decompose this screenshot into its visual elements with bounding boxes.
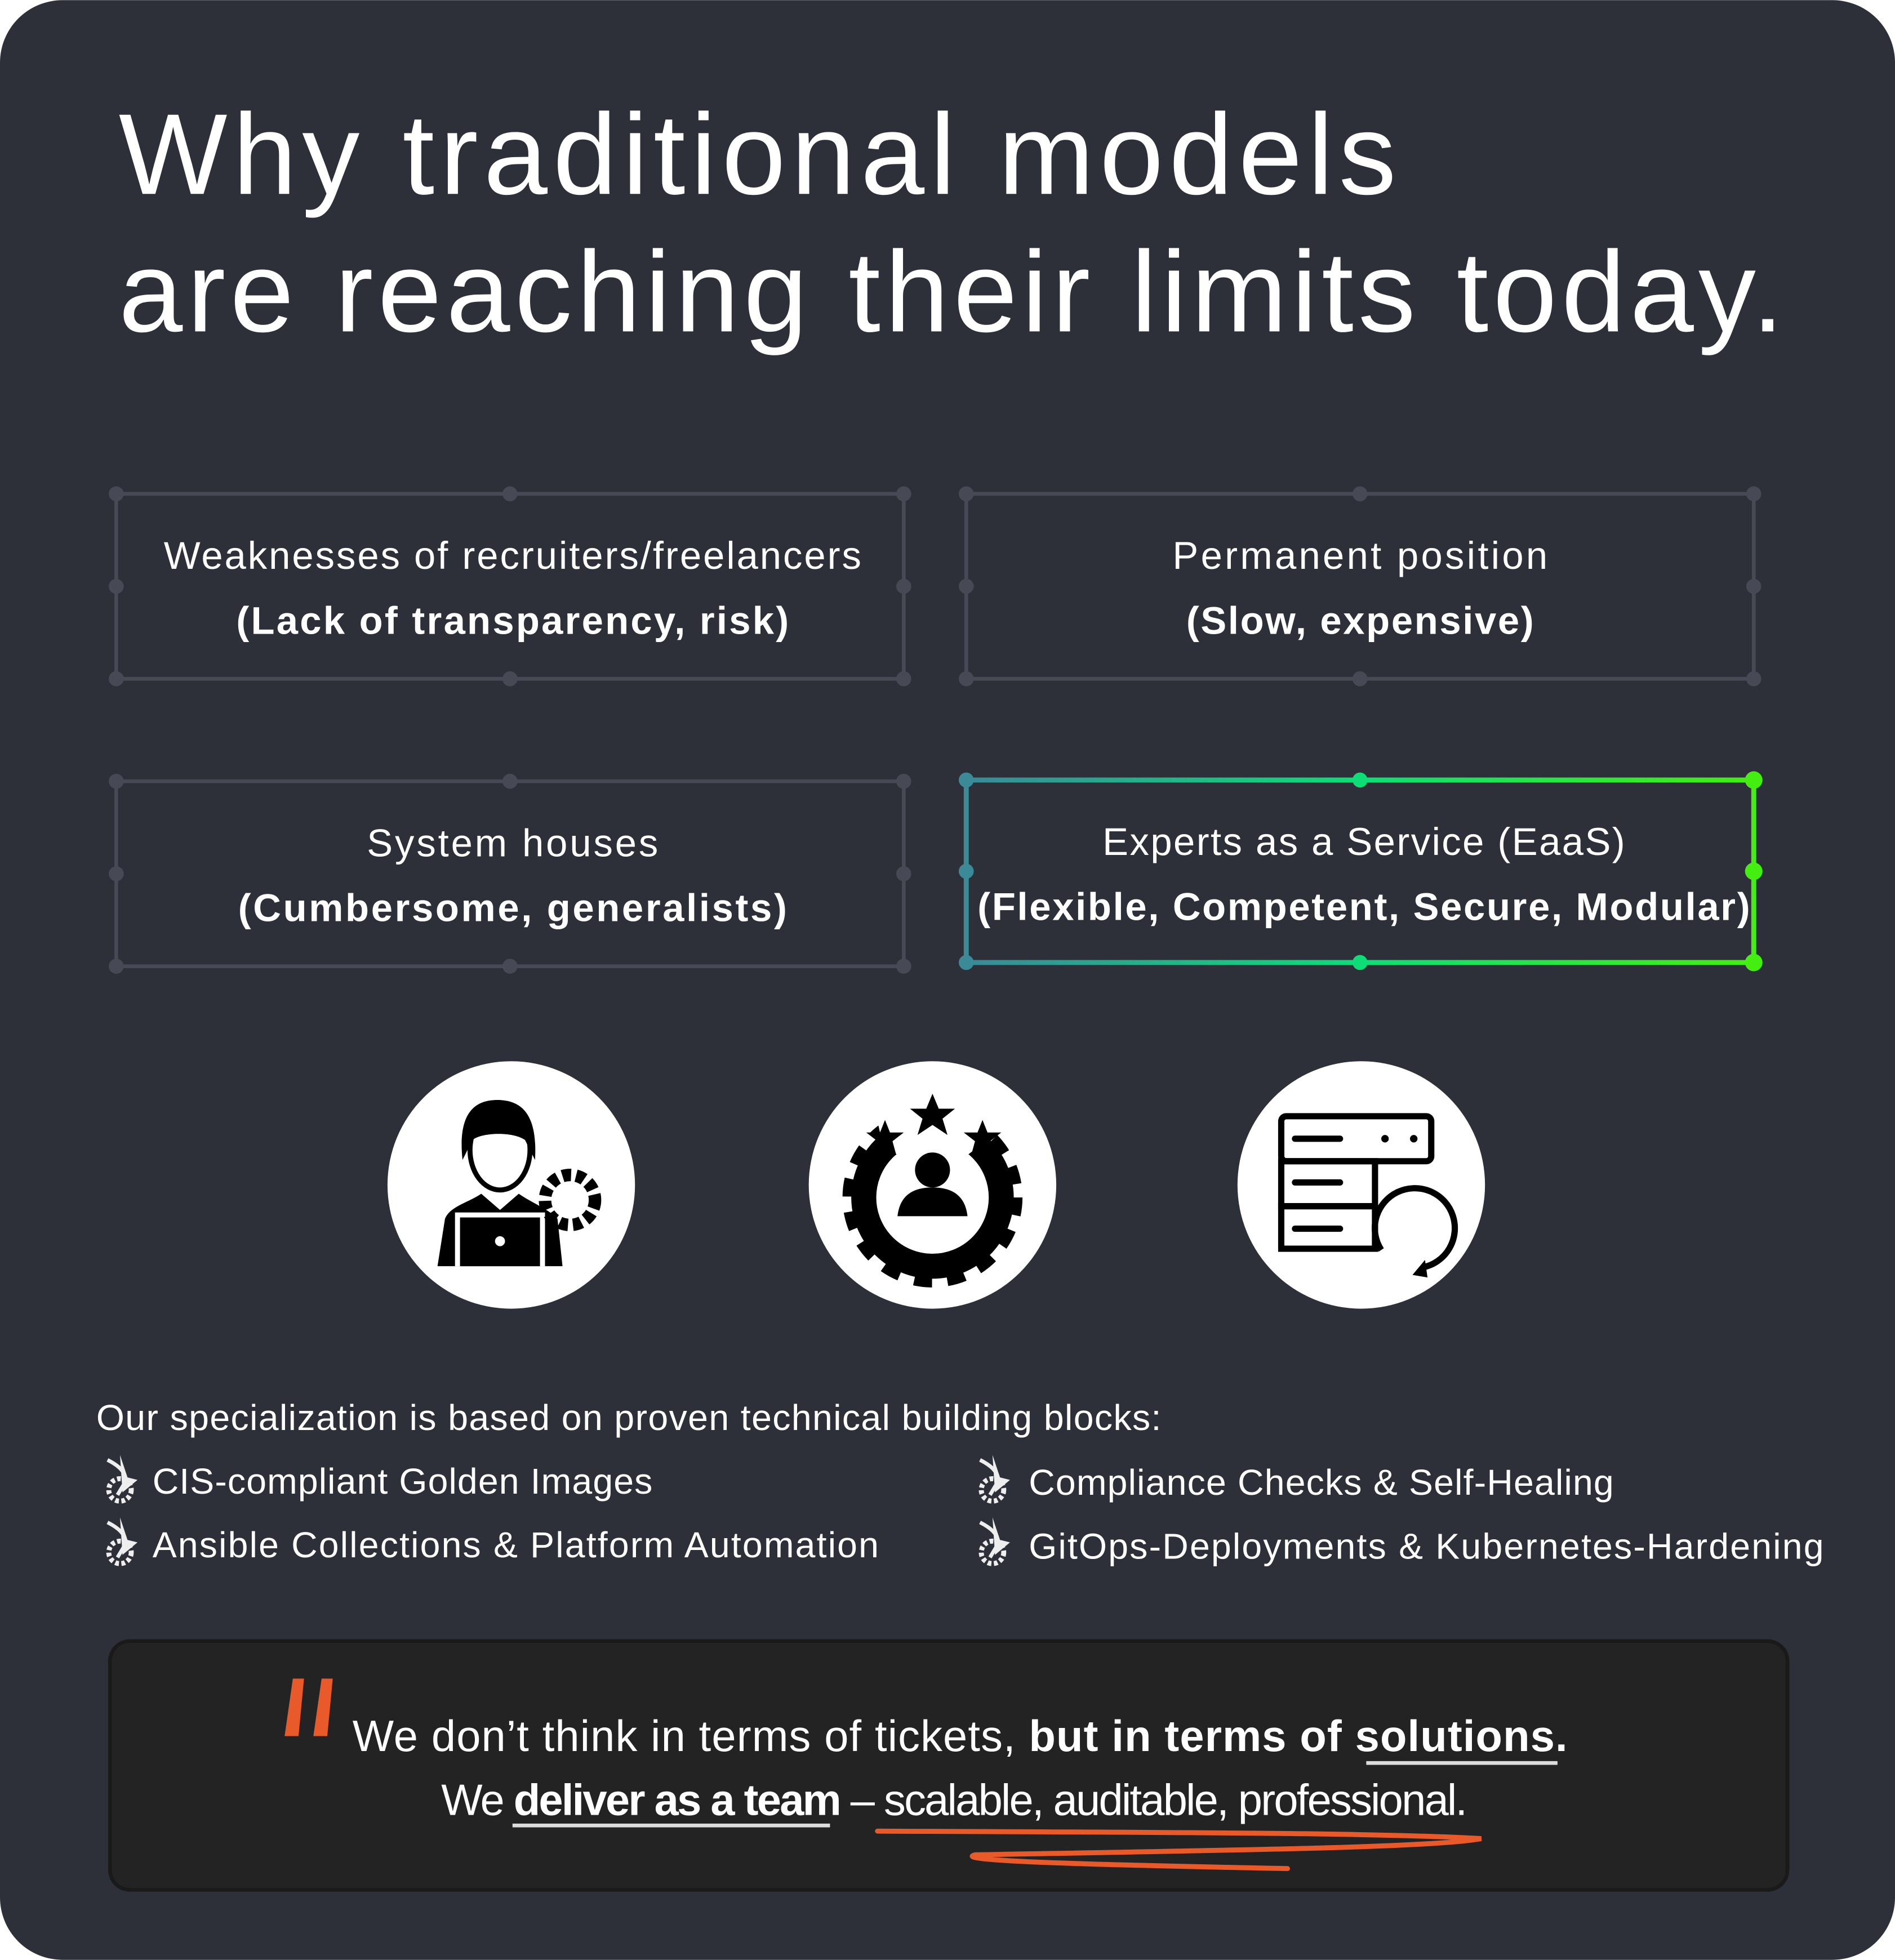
bullet list: GitOps-Deployments & Kubernetes-Hardening — [1029, 1526, 1824, 1566]
quote panel: We deliver as a team – scalable, auditable, professional. — [441, 1776, 1467, 1824]
bullet list — [108, 1455, 1824, 1566]
title — [119, 90, 1784, 356]
box: permanent position: (Slow, expensive) — [1186, 599, 1534, 642]
box: recruiters/freelancers: Weaknesses of recruiters/freelancers — [164, 534, 861, 577]
quote panel: We don’t think in terms of tickets, but in terms of solutions. — [353, 1712, 1568, 1761]
icon: gear with person and stars — [809, 1061, 1056, 1309]
box: system houses: (Cumbersome, generalists) — [238, 887, 787, 930]
box: EaaS highlighted — [959, 771, 1763, 971]
box: permanent position — [959, 486, 1761, 687]
text: specialization intro: Our specialization is based on proven technical building blocks: — [96, 1397, 1161, 1438]
bullet list: CIS-compliant Golden Images — [153, 1461, 652, 1502]
title: Why traditional models — [119, 90, 1396, 219]
box: system houses — [109, 774, 911, 974]
icon: server with refresh — [1238, 1061, 1485, 1309]
box: recruiters/freelancers — [109, 486, 911, 687]
box: EaaS highlighted: (Flexible, Competent, Secure, Modular) — [977, 885, 1750, 928]
box: permanent position: Permanent position — [1172, 534, 1547, 577]
bullet list: Compliance Checks & Self-Healing — [1029, 1462, 1614, 1503]
icon: expert with laptop — [388, 1061, 635, 1309]
quote panel — [110, 1641, 1787, 1890]
bullet list: Ansible Collections & Platform Automation — [153, 1525, 879, 1565]
title: are reaching their limits today. — [119, 228, 1784, 356]
box: system houses: System houses — [367, 821, 658, 865]
icon: quote mark — [287, 1681, 330, 1734]
box: recruiters/freelancers: (Lack of transparency, risk) — [236, 599, 789, 642]
box: EaaS highlighted: Experts as a Service (EaaS) — [1102, 820, 1625, 863]
